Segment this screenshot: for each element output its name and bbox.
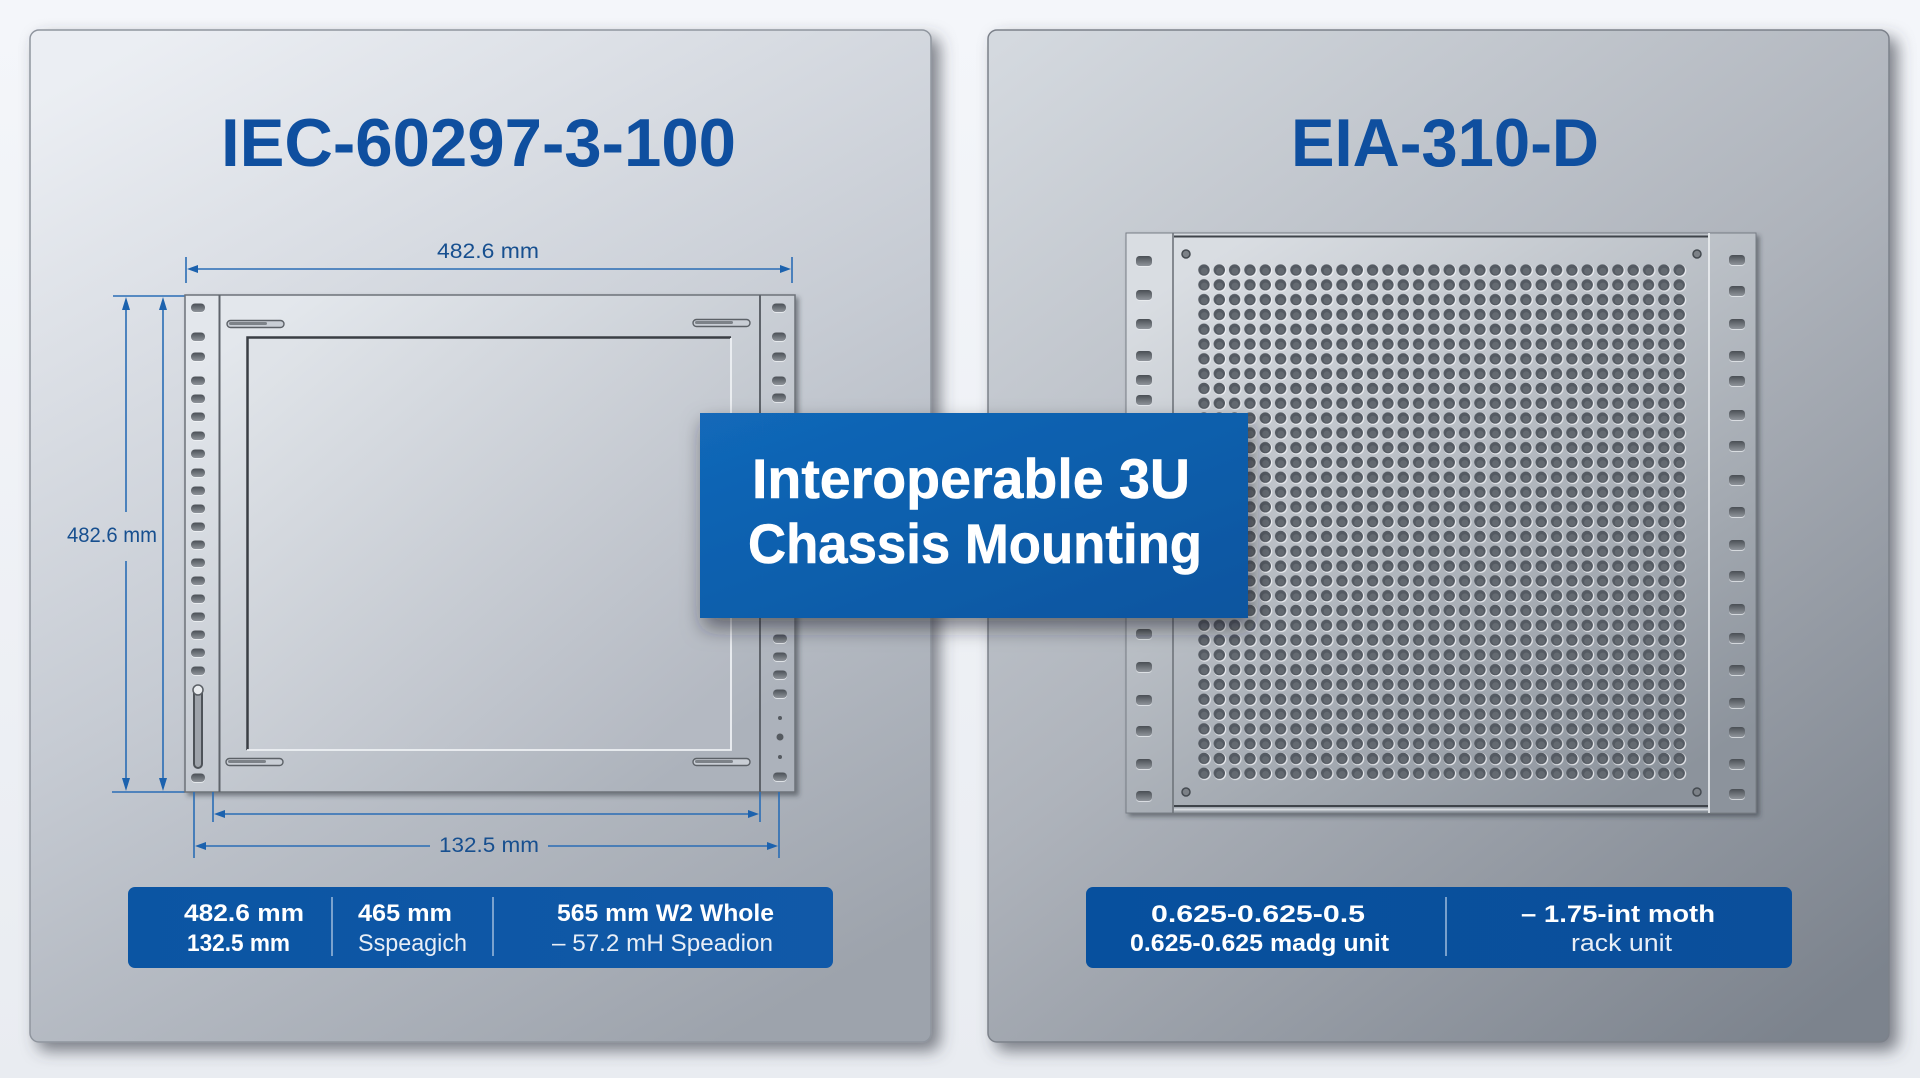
- left height dimension: 482.6 mm: [67, 524, 157, 547]
- perforated rack panel: [1126, 233, 1756, 813]
- corner screws: [1182, 250, 1701, 796]
- handle: [193, 685, 203, 768]
- left spec bar: 132.5 mm: [187, 930, 290, 957]
- left spec bar: Sspeagich: [358, 930, 467, 957]
- top width dimension: [186, 240, 792, 283]
- top width dimension: 482.6 mm: [437, 240, 539, 263]
- left panel plate: [30, 30, 931, 1042]
- left spec bar: 482.6 mm: [184, 900, 304, 927]
- perforation grid: [1196, 263, 1687, 781]
- rack plate: [1126, 233, 1756, 813]
- panel: EIA-310-D: [988, 30, 1889, 1042]
- left spec bar: 565 mm W2 Whole: [557, 900, 774, 927]
- center title banner: [700, 413, 1248, 618]
- right panel plate: [988, 30, 1889, 1042]
- right spec bar: rack unit: [1571, 930, 1672, 957]
- left spec bar: [128, 887, 833, 968]
- right spec bar: [1086, 887, 1792, 968]
- latches: [226, 320, 750, 766]
- right spec bar: 0.625-0.625-0.5: [1151, 901, 1365, 928]
- panel: IEC-60297-3-100: [30, 30, 931, 1042]
- inner window: [247, 337, 731, 750]
- right rack rail slots: [1729, 255, 1745, 800]
- bottom width dimensions: 132.5 mm: [439, 834, 539, 857]
- left spec bar: – 57.2 mH Speadion: [552, 930, 773, 957]
- frame plate: [185, 295, 795, 792]
- left height dimension: [67, 296, 185, 792]
- center title banner: Chassis Mounting: [748, 512, 1202, 575]
- right panel heading: EIA-310-D: [1291, 105, 1599, 181]
- bottom width dimensions: [194, 792, 779, 858]
- left rack rail slots: [1136, 256, 1152, 802]
- right spec bar: – 1.75-int moth: [1521, 901, 1715, 928]
- left rail slots: [191, 304, 205, 783]
- right spec bar: 0.625-0.625 madg unit: [1130, 930, 1389, 957]
- left panel heading: IEC-60297-3-100: [221, 105, 736, 181]
- left spec bar: 465 mm: [358, 900, 452, 927]
- right rail slots: [772, 304, 787, 782]
- center title banner: Interoperable 3U: [752, 447, 1190, 510]
- mounting frame diagram: [185, 295, 795, 792]
